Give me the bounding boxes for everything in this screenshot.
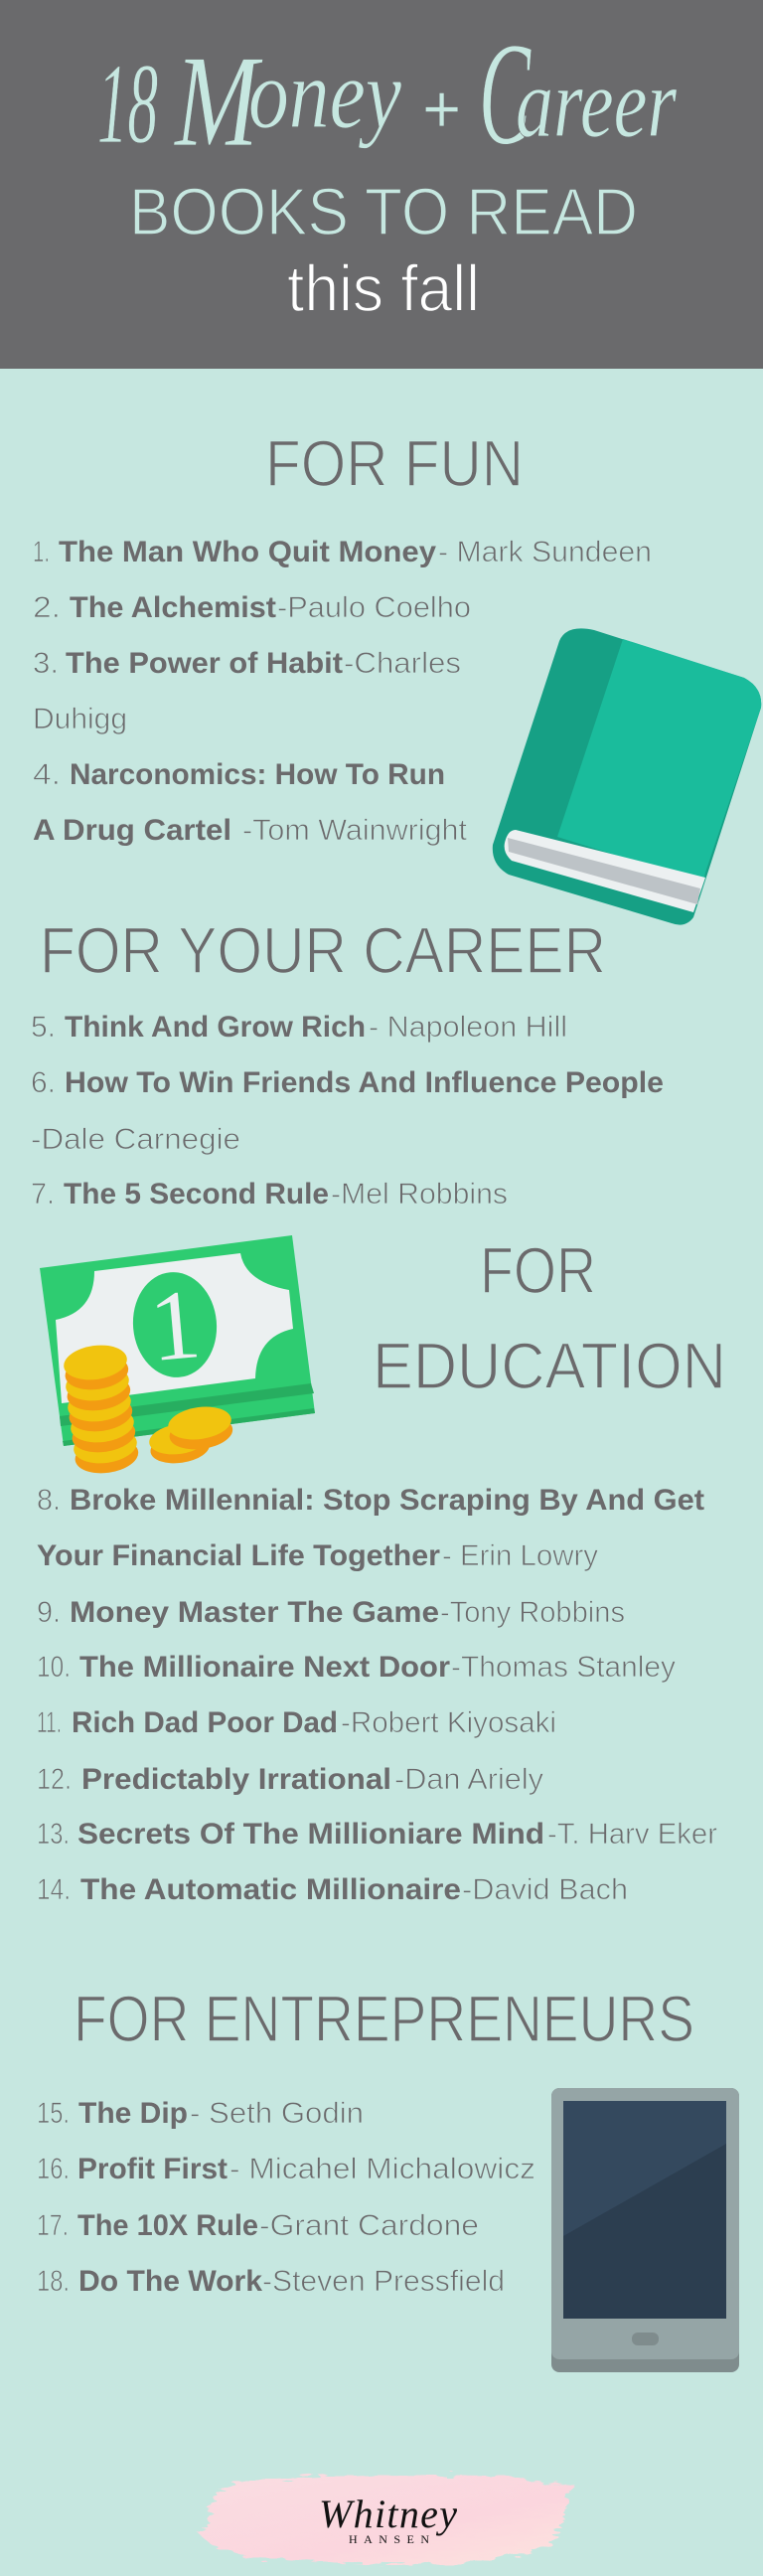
item 15 bbox=[37, 2097, 364, 2130]
item 13: Secrets Of The Millioniare Mind bbox=[77, 1818, 544, 1851]
item 11: Rich Dad Poor Dad bbox=[72, 1706, 338, 1739]
item 5: Think And Grow Rich bbox=[65, 1011, 366, 1044]
wordmark: HANSEN bbox=[349, 2532, 429, 2546]
bill: 1 bbox=[145, 1268, 205, 1382]
item 8: 8. bbox=[37, 1484, 61, 1517]
item 7: 7. bbox=[31, 1178, 55, 1210]
header panel bbox=[0, 0, 763, 369]
item 15: - Seth Godin bbox=[190, 2097, 364, 2130]
item 16: - Micahel Michalowicz bbox=[229, 2153, 535, 2185]
item 8 bbox=[37, 1484, 704, 1572]
coin stack bbox=[62, 1342, 140, 1477]
book list: for education bbox=[37, 1484, 717, 1906]
item 5: 5. bbox=[31, 1011, 56, 1044]
item 17: 17. bbox=[37, 2209, 69, 2242]
title: 18 Money + Career: oney bbox=[248, 39, 401, 149]
item 12: 12. bbox=[37, 1763, 72, 1796]
subtitle: this fall: this fall bbox=[287, 251, 480, 325]
item 9 bbox=[37, 1596, 625, 1629]
item 16: 16. bbox=[37, 2153, 70, 2185]
item 13: 13. bbox=[37, 1818, 70, 1851]
title: 18 Money + Career: + bbox=[421, 70, 461, 149]
item 9: 9. bbox=[37, 1596, 61, 1629]
item 14: 14. bbox=[37, 1873, 71, 1906]
item 4 bbox=[33, 758, 468, 847]
item 2: The Alchemist bbox=[70, 591, 276, 624]
item 11: -Robert Kiyosaki bbox=[341, 1706, 556, 1739]
item 18: 18. bbox=[37, 2265, 70, 2298]
item 2: 2. bbox=[33, 591, 61, 624]
item 6 bbox=[31, 1066, 664, 1156]
item 15: 15. bbox=[37, 2097, 70, 2130]
item 12 bbox=[37, 1763, 543, 1796]
item 10: 10. bbox=[37, 1651, 71, 1684]
item 6: 6. bbox=[31, 1066, 56, 1099]
item 3 bbox=[33, 647, 461, 735]
item 18: Do The Work bbox=[78, 2265, 262, 2298]
item 7: The 5 Second Rule bbox=[64, 1178, 329, 1210]
title: 18 Money + Career: M bbox=[173, 28, 263, 174]
item 15: The Dip bbox=[78, 2097, 188, 2130]
title: 18 Money + Career: areer bbox=[516, 48, 678, 158]
item 5: - Napoleon Hill bbox=[369, 1011, 567, 1044]
item 8: - Erin Lowry bbox=[442, 1539, 598, 1572]
loose coins bbox=[147, 1403, 234, 1467]
book list: for entrepreneurs bbox=[37, 2097, 535, 2298]
item 1: - Mark Sundeen bbox=[438, 536, 652, 568]
heading: for education: EDUCATION bbox=[373, 1329, 726, 1402]
item 3: The Power of Habit bbox=[66, 647, 343, 680]
item 14: The Automatic Millionaire bbox=[80, 1873, 461, 1906]
bill bbox=[40, 1235, 315, 1446]
item 7 bbox=[31, 1178, 508, 1210]
item 4: -Tom Wainwright bbox=[242, 814, 468, 847]
item 10: -Thomas Stanley bbox=[451, 1651, 676, 1684]
brush stroke bbox=[197, 2475, 576, 2565]
item 12: -Dan Ariely bbox=[394, 1763, 543, 1796]
icon: tablet bbox=[551, 2088, 739, 2372]
item 10 bbox=[37, 1651, 676, 1684]
icon: dollar bill and coins bbox=[40, 1235, 315, 1477]
item 11: 11. bbox=[37, 1706, 62, 1739]
item 17: -Grant Cardone bbox=[259, 2209, 479, 2242]
wordmark: Whitney bbox=[319, 2492, 457, 2536]
icon: green book bbox=[493, 628, 761, 925]
item 13 bbox=[37, 1818, 717, 1851]
item 2 bbox=[33, 591, 471, 624]
title: 18 Money + Career: C bbox=[479, 13, 532, 176]
item 14: -David Bach bbox=[462, 1873, 628, 1906]
item 5 bbox=[31, 1011, 567, 1044]
item 9: -Tony Robbins bbox=[440, 1596, 625, 1629]
heading: for your career: FOR YOUR CAREER bbox=[40, 913, 606, 987]
item 3: -Charles bbox=[344, 647, 461, 680]
item 4: A Drug Cartel bbox=[33, 814, 231, 847]
subtitle: books to read: BOOKS TO READ bbox=[129, 175, 638, 249]
book list: for fun bbox=[33, 536, 652, 847]
item 11 bbox=[37, 1706, 556, 1739]
item 16: Profit First bbox=[77, 2153, 228, 2185]
item 8: Broke Millennial: Stop Scraping By And Get bbox=[70, 1484, 704, 1517]
item 3: 3. bbox=[33, 647, 59, 680]
item 2: -Paulo Coelho bbox=[277, 591, 471, 624]
item 9: Money Master The Game bbox=[70, 1596, 439, 1629]
item 8: Your Financial Life Together bbox=[37, 1539, 440, 1572]
item 14 bbox=[37, 1873, 628, 1906]
title: 18 Money + Career: 18 bbox=[97, 41, 158, 167]
item 1: The Man Who Quit Money bbox=[59, 536, 436, 568]
heading: for education: FOR bbox=[480, 1233, 596, 1307]
item 17: The 10X Rule bbox=[77, 2209, 258, 2242]
item 12: Predictably Irrational bbox=[81, 1763, 391, 1796]
item 1: 1. bbox=[33, 536, 50, 568]
item 10: The Millionaire Next Door bbox=[79, 1651, 450, 1684]
item 7: -Mel Robbins bbox=[331, 1178, 508, 1210]
item 18 bbox=[37, 2265, 505, 2298]
heading: for education bbox=[373, 1233, 726, 1402]
item 4: Narconomics: How To Run bbox=[70, 758, 445, 791]
logo: whitney hansen bbox=[197, 2475, 576, 2565]
title: 18 Money + Career bbox=[97, 13, 678, 176]
item 13: -T. Harv Eker bbox=[547, 1818, 717, 1851]
item 17 bbox=[37, 2209, 479, 2242]
item 3: Duhigg bbox=[33, 703, 127, 735]
item 18: -Steven Pressfield bbox=[262, 2265, 505, 2298]
book list: for your career bbox=[31, 1011, 664, 1210]
item 16 bbox=[37, 2153, 535, 2185]
item 1 bbox=[33, 536, 652, 568]
item 6: How To Win Friends And Influence People bbox=[65, 1066, 664, 1099]
heading: for fun: FOR FUN bbox=[265, 426, 524, 500]
item 4: 4. bbox=[33, 758, 61, 791]
item 6: -Dale Carnegie bbox=[31, 1123, 240, 1156]
